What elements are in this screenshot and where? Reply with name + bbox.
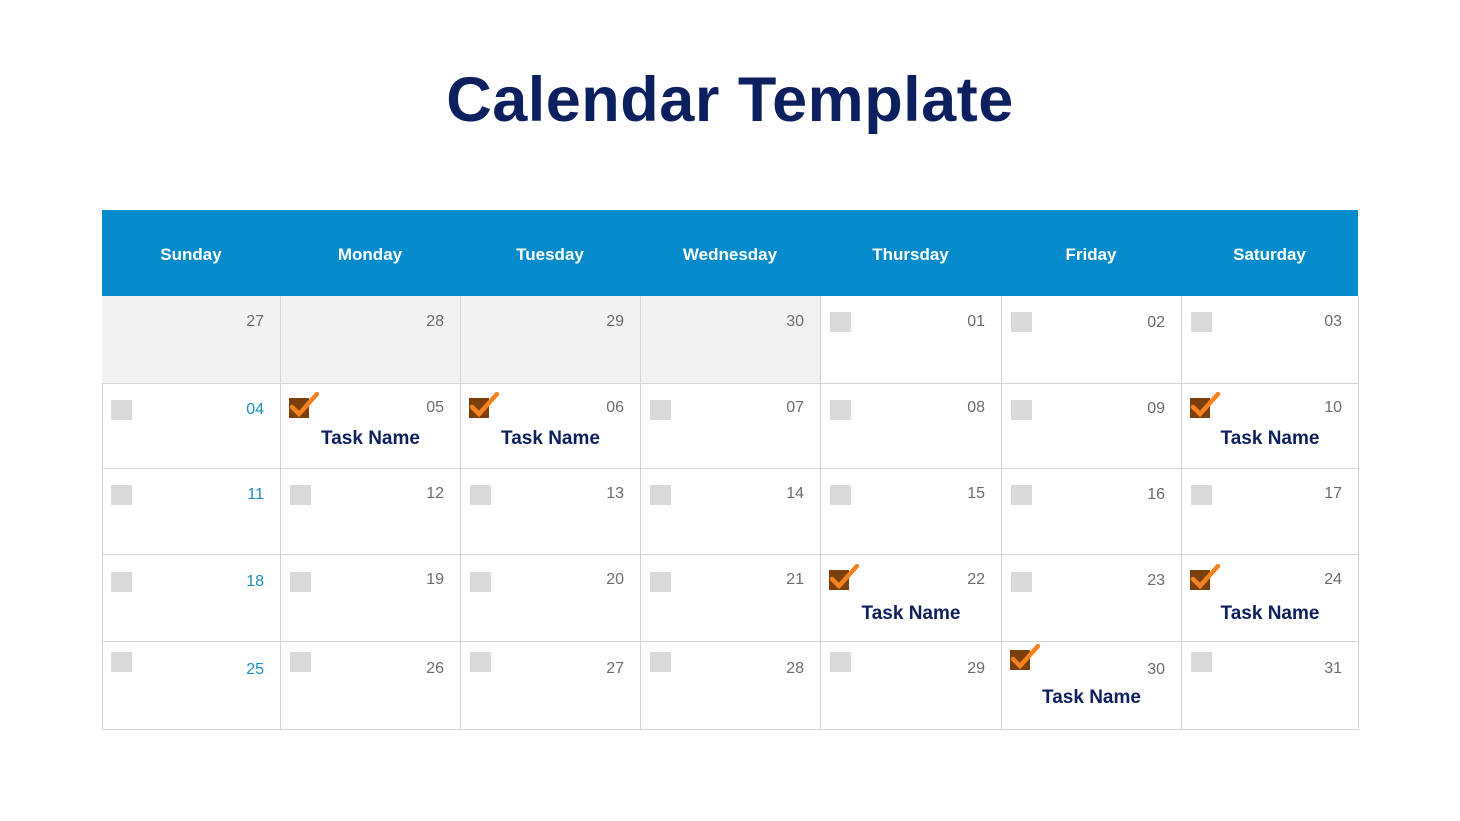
row 2 — [102, 384, 281, 469]
text: Thursday — [872, 245, 949, 264]
calendar grid: 08 — [967, 399, 985, 416]
calendar grid: 16 — [1147, 486, 1165, 503]
row 1 — [102, 296, 281, 384]
calendar grid: Task Name — [501, 428, 600, 449]
calendar grid: 06 — [606, 399, 624, 416]
calendar grid: 30 — [1147, 661, 1165, 678]
row 2: 04 — [246, 401, 264, 418]
calendar grid: 29 — [967, 660, 985, 677]
calendar grid: 05 — [426, 399, 444, 416]
text: Sunday — [160, 245, 222, 264]
row 5: 25 — [246, 661, 264, 678]
day headers — [160, 245, 1306, 264]
calendar grid: 30 — [786, 313, 804, 330]
row 5 — [102, 642, 281, 730]
calendar grid: 21 — [786, 571, 804, 588]
calendar grid — [102, 296, 1358, 730]
text: Friday — [1065, 245, 1117, 264]
calendar grid: 13 — [606, 485, 624, 502]
row 3: 11 — [247, 486, 264, 503]
calendar grid: 10 — [1324, 399, 1342, 416]
calendar grid: 19 — [426, 571, 444, 588]
calendar grid: 20 — [606, 571, 624, 588]
row 3 — [102, 469, 281, 555]
calendar grid: 31 — [1324, 660, 1342, 677]
calendar grid: 09 — [1147, 400, 1165, 417]
header bar — [102, 210, 1358, 296]
calendar grid: 29 — [606, 313, 624, 330]
calendar grid: Task Name — [1221, 428, 1319, 449]
calendar grid: 01 — [967, 313, 985, 330]
row 4: 18 — [246, 573, 264, 590]
calendar grid: 14 — [786, 485, 804, 502]
calendar grid: Task Name — [321, 428, 420, 449]
calendar grid: 12 — [426, 485, 444, 502]
calendar grid: 15 — [967, 485, 985, 502]
text: Monday — [338, 245, 402, 264]
text: Tuesday — [516, 245, 584, 264]
row 4 — [102, 555, 281, 642]
calendar grid: 17 — [1324, 485, 1342, 502]
calendar grid: 07 — [786, 399, 804, 416]
calendar grid: 28 — [786, 660, 804, 677]
calendar grid: 28 — [426, 313, 444, 330]
calendar grid: 27 — [606, 660, 624, 677]
title: Calendar Template — [446, 65, 1014, 135]
calendar grid: 24 — [1324, 571, 1342, 588]
calendar grid: 22 — [967, 571, 985, 588]
calendar grid: Task Name — [1221, 603, 1319, 624]
calendar grid: 23 — [1147, 572, 1165, 589]
text: Wednesday — [683, 245, 777, 264]
calendar grid: 02 — [1147, 314, 1165, 331]
calendar grid: Task Name — [1042, 687, 1141, 708]
calendar grid: 03 — [1324, 313, 1342, 330]
calendar grid: Task Name — [862, 603, 960, 624]
text: Saturday — [1233, 245, 1306, 264]
calendar grid: 26 — [426, 660, 444, 677]
row 1: 27 — [246, 313, 264, 330]
